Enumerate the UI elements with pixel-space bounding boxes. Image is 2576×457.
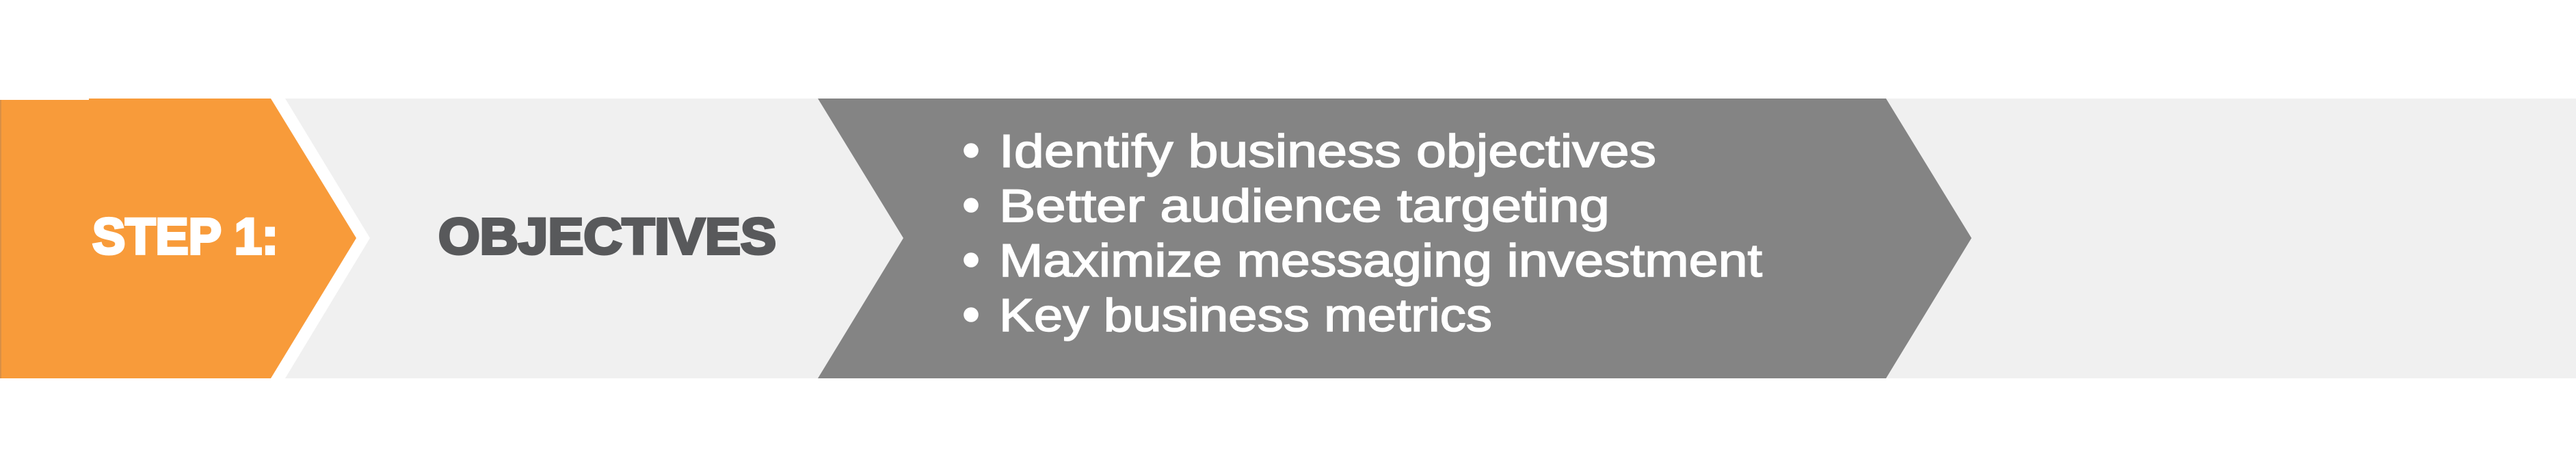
panel: step chevron (0, 99, 356, 378)
text block: objectives list (964, 125, 1762, 341)
list item: identify business objectives: Identify business objectives (999, 125, 1656, 177)
panel edge: step chevron left edge (0, 100, 1, 378)
heading: step number: STEP 1: (92, 208, 278, 265)
panel: trailing light band (1846, 99, 2576, 378)
heading: objectives: OBJECTIVES (438, 208, 776, 265)
panel: bullet list chevron (818, 99, 1971, 378)
panel: objectives label chevron (285, 99, 903, 378)
list item: maximize messaging investment: Maximize messaging investment (999, 235, 1762, 287)
list item: key business metrics: Key business metrics (999, 289, 1492, 341)
list item: better audience targeting: Better audience targeting (999, 180, 1610, 232)
